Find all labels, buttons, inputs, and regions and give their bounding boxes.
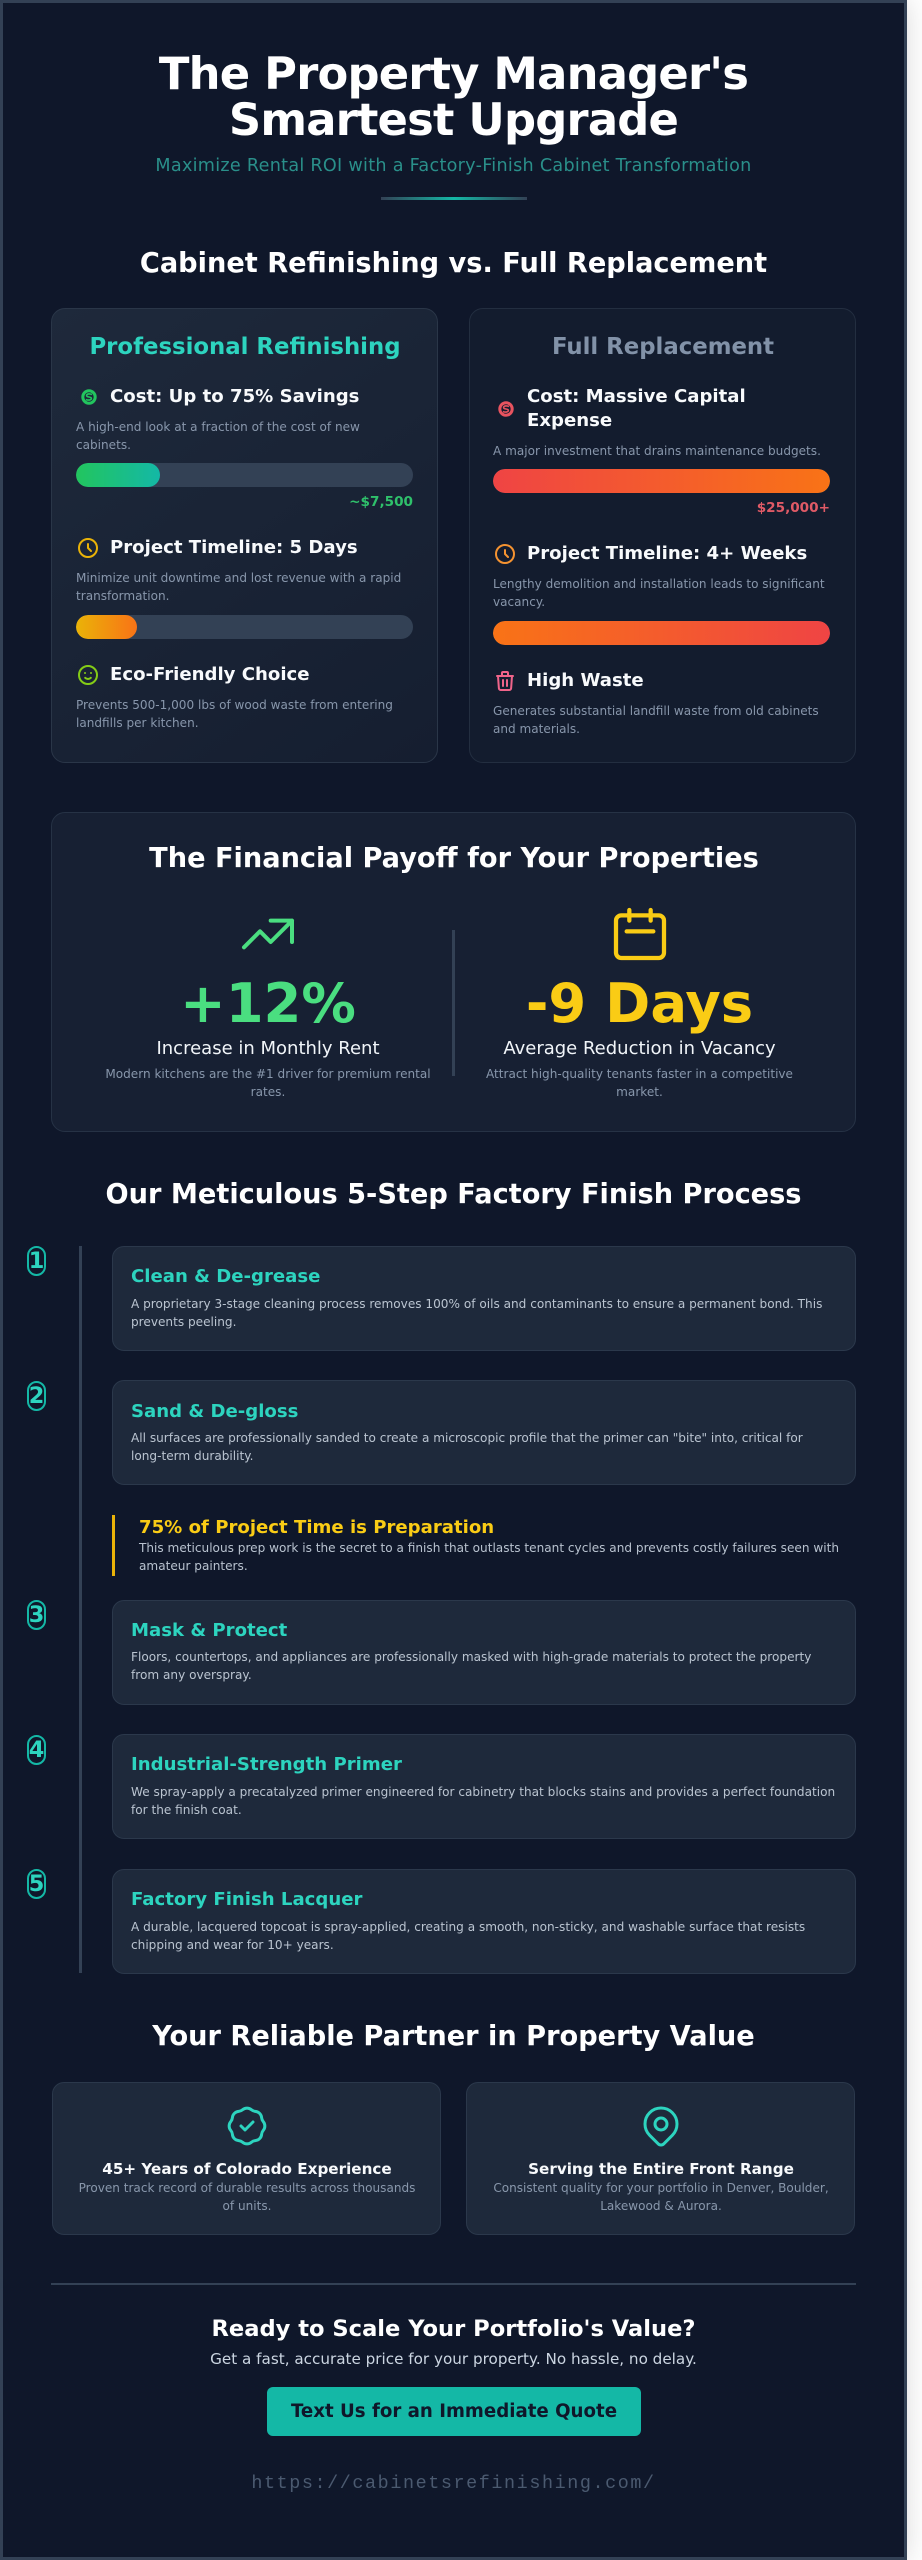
heading: partner: Your Reliable Partner in Property Value [152, 2021, 755, 2052]
eco description: landfills per kitchen. [76, 716, 199, 730]
icon: smile [78, 665, 98, 685]
heading: comparison: Cabinet Refinishing vs. Full Replacement [140, 248, 767, 278]
icon: trending up [242, 918, 294, 950]
call to action [210, 2316, 697, 2494]
cta text: Get a fast, accurate price for your property. No hassle, no delay. [210, 2350, 697, 2368]
title: The Property Manager's [159, 46, 748, 100]
step 4 card [112, 1734, 856, 1839]
step 1 card [112, 1246, 856, 1351]
panel: full replacement [469, 308, 856, 763]
eco title: Eco-Friendly Choice [110, 664, 310, 685]
panel heading: Full Replacement [552, 334, 774, 360]
stat: monthly rent [105, 918, 431, 1099]
step 2 card [112, 1380, 856, 1485]
experience text [79, 2181, 415, 2213]
icon: trash [496, 671, 514, 691]
timeline title: Project Timeline: 4+ Weeks [527, 543, 807, 564]
step 3 number: 3 [29, 1602, 44, 1628]
experience text: Proven track record of durable results across thousands [79, 2181, 415, 2195]
cta button: Text Us for an Immediate Quote [291, 2401, 617, 2422]
cta button [267, 2387, 641, 2436]
waste description: and materials. [493, 722, 580, 736]
step 1 number: 1 [29, 1248, 44, 1274]
stat: vacancy [486, 908, 793, 1099]
timeline description [493, 577, 825, 609]
panel: experience [52, 2082, 441, 2235]
heading: process: Our Meticulous 5-Step Factory Finish Process [106, 1178, 801, 1210]
timeline description: transformation. [76, 589, 169, 603]
service text [493, 2181, 829, 2213]
rent description: Modern kitchens are the #1 driver for premium rental [105, 1067, 431, 1081]
website url: https://cabinetsrefinishing.com/ [251, 2473, 656, 2494]
cost bar [493, 469, 830, 493]
vacancy label: Average Reduction in Vacancy [503, 1038, 776, 1059]
timeline description: Minimize unit downtime and lost revenue with a rapid [76, 571, 401, 585]
icon: clock [495, 544, 515, 564]
cta heading: Ready to Scale Your Portfolio's Value? [211, 2316, 696, 2342]
step 5 number: 5 [29, 1871, 44, 1897]
icon: calendar [614, 908, 666, 960]
cost title: Cost: Massive Capital [527, 386, 746, 407]
waste title: High Waste [527, 670, 644, 691]
rent description: rates. [251, 1085, 285, 1099]
cost description: A major investment that drains maintenance budgets. [493, 444, 821, 458]
step 2 title: Sand & De-gloss [131, 1401, 298, 1422]
vacancy value: -9 Days [526, 972, 753, 1035]
callout title: 75% of Project Time is Preparation [139, 1517, 494, 1538]
cost description: A high-end look at a fraction of the cost of new [76, 420, 360, 434]
cost amount: $25,000+ [757, 500, 830, 516]
step 5 text: chipping and wear for 10+ years. [131, 1938, 334, 1952]
rent label: Increase in Monthly Rent [156, 1038, 380, 1059]
step 4 text [131, 1785, 835, 1817]
timeline description [76, 571, 401, 603]
step 5 text: A durable, lacquered topcoat is spray-applied, creating a smooth, non-sticky, and washable surface that resists [131, 1920, 805, 1934]
step 5 card [112, 1869, 856, 1974]
step 3 text: from any overspray. [131, 1668, 252, 1682]
callout text: This meticulous prep work is the secret to a finish that outlasts tenant cycles and prevents costly failures seen with [139, 1541, 839, 1555]
timeline bar [493, 621, 830, 645]
step 1 title: Clean & De-grease [131, 1266, 320, 1287]
financial heading: The Financial Payoff for Your Properties [149, 843, 759, 874]
subtitle: Maximize Rental ROI with a Factory-Finish Cabinet Transformation [155, 156, 752, 176]
panel: professional refinishing [51, 308, 438, 763]
vacancy description: market. [616, 1085, 663, 1099]
panel: service area [466, 2082, 855, 2235]
callout text [138, 1541, 839, 1573]
callout: preparation [112, 1515, 856, 1576]
step 4 text: We spray-apply a precatalyzed primer engineered for cabinetry that blocks stains and provides a perfect foundation [131, 1785, 835, 1799]
step 2 text: All surfaces are professionally sanded to create a microscopic profile that the primer can "bite" into, critical for [131, 1431, 803, 1445]
step 4 text: for the finish coat. [131, 1803, 242, 1817]
timeline description: vacancy. [493, 595, 545, 609]
timeline description: Lengthy demolition and installation leads to significant [493, 577, 825, 591]
experience title: 45+ Years of Colorado Experience [102, 2160, 392, 2178]
icon: clock [78, 538, 98, 558]
waste description [493, 704, 819, 736]
service text: Lakewood & Aurora. [600, 2199, 722, 2213]
divider between stats [452, 930, 455, 1076]
step 2 number: 2 [29, 1383, 44, 1409]
cost description: cabinets. [76, 438, 131, 452]
panel: financial payoff [51, 812, 856, 1132]
title: Smartest Upgrade [229, 92, 678, 146]
step 5 title: Factory Finish Lacquer [131, 1889, 362, 1910]
timeline title: Project Timeline: 5 Days [110, 537, 358, 558]
step 2 text [131, 1431, 803, 1463]
cost title: Expense [527, 410, 612, 431]
step 2 text: long-term durability. [131, 1449, 254, 1463]
cost title: Cost: Up to 75% Savings [110, 386, 359, 407]
icon: badge check [228, 2106, 266, 2146]
title [159, 46, 748, 146]
step 5 text [131, 1920, 805, 1952]
timeline bar [76, 615, 413, 639]
experience text: of units. [223, 2199, 271, 2213]
header [155, 46, 752, 200]
service title: Serving the Entire Front Range [528, 2160, 794, 2178]
vacancy description: Attract high-quality tenants faster in a competitive [486, 1067, 793, 1081]
eco description: Prevents 500-1,000 lbs of wood waste from entering [76, 698, 393, 712]
vacancy description [486, 1067, 793, 1099]
rent value: +12% [180, 972, 356, 1035]
step 3 text: Floors, countertops, and appliances are professionally masked with high-grade materials to protect the property [131, 1650, 811, 1664]
cost description [76, 420, 360, 452]
step 3 card [112, 1600, 856, 1705]
panel heading: Professional Refinishing [89, 334, 401, 360]
icon: dollar [498, 401, 514, 417]
icon: dollar [81, 389, 97, 405]
step 1 text: prevents peeling. [131, 1315, 236, 1329]
cost title [527, 386, 746, 431]
cost bar [76, 463, 413, 487]
header accent line [381, 197, 527, 200]
process timeline line [79, 1246, 82, 1973]
step 3 title: Mask & Protect [131, 1620, 287, 1641]
callout text: amateur painters. [139, 1559, 248, 1573]
cost amount: ~$7,500 [349, 494, 413, 510]
step 3 text [131, 1650, 811, 1682]
waste description: Generates substantial landfill waste from old cabinets [493, 704, 819, 718]
icon: map pin [644, 2106, 678, 2146]
step 1 text: A proprietary 3-stage cleaning process removes 100% of oils and contaminants to ensure a permanent bond. This [131, 1297, 822, 1311]
service text: Consistent quality for your portfolio in Denver, Boulder, [493, 2181, 829, 2195]
eco description [76, 698, 393, 730]
step 4 title: Industrial-Strength Primer [131, 1754, 402, 1775]
step 1 text [131, 1297, 822, 1329]
step 4 number: 4 [29, 1737, 44, 1763]
rent description [105, 1067, 431, 1099]
